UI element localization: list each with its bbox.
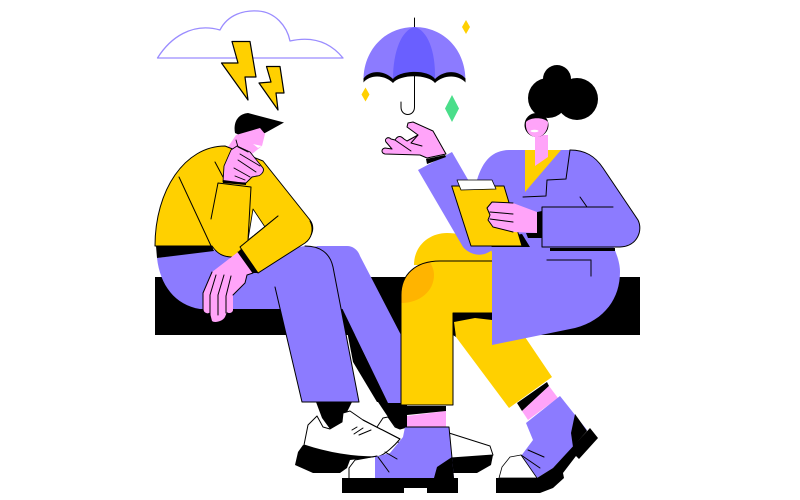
resting hand [203,252,253,322]
umbrella [364,18,466,114]
lapel [523,150,587,207]
bench [155,277,640,335]
man's body [155,113,400,473]
shoe sole two [451,455,493,473]
cloud outline [158,11,343,58]
v-neck [525,150,561,192]
seat shadow [478,262,492,316]
lightning bolts [222,42,284,110]
shoe sole [295,445,377,473]
sleeve [211,183,251,256]
knee shade [401,261,434,303]
pink sock [407,411,446,427]
man's back leg and shoe [317,246,407,443]
clipboard clip [457,180,496,190]
coat lower [492,244,620,345]
hand cuff [426,155,446,164]
chin hand [223,146,263,183]
back knee [414,233,492,265]
belt [156,246,214,258]
second boot shoe [449,433,493,458]
head [228,128,265,154]
man's sock [316,402,352,429]
woman's back leg and boot [453,313,598,493]
face [524,113,548,137]
hair buns [528,65,598,120]
arm gap [248,209,265,240]
coat torso [477,150,640,253]
raised sleeve [418,152,500,255]
clipboard hand [487,202,537,233]
right coat outline [542,150,640,247]
cuff [526,211,542,238]
sparkles [362,20,470,122]
cheek highlight [253,144,262,148]
front leg [401,261,492,405]
lower sleeve [239,216,312,273]
woman [342,65,640,493]
front leg [275,246,359,402]
hair [235,113,284,140]
sweater [155,146,313,273]
sweater creases [179,162,278,248]
open hand [382,122,446,158]
man's shoe [304,411,400,457]
clipboard shadow [480,234,530,247]
pants thigh [157,246,345,309]
front leg outline [401,261,492,405]
neck [535,135,548,166]
clipboard [452,186,522,246]
under sleeve shadow [550,248,615,251]
front boot [375,427,454,478]
